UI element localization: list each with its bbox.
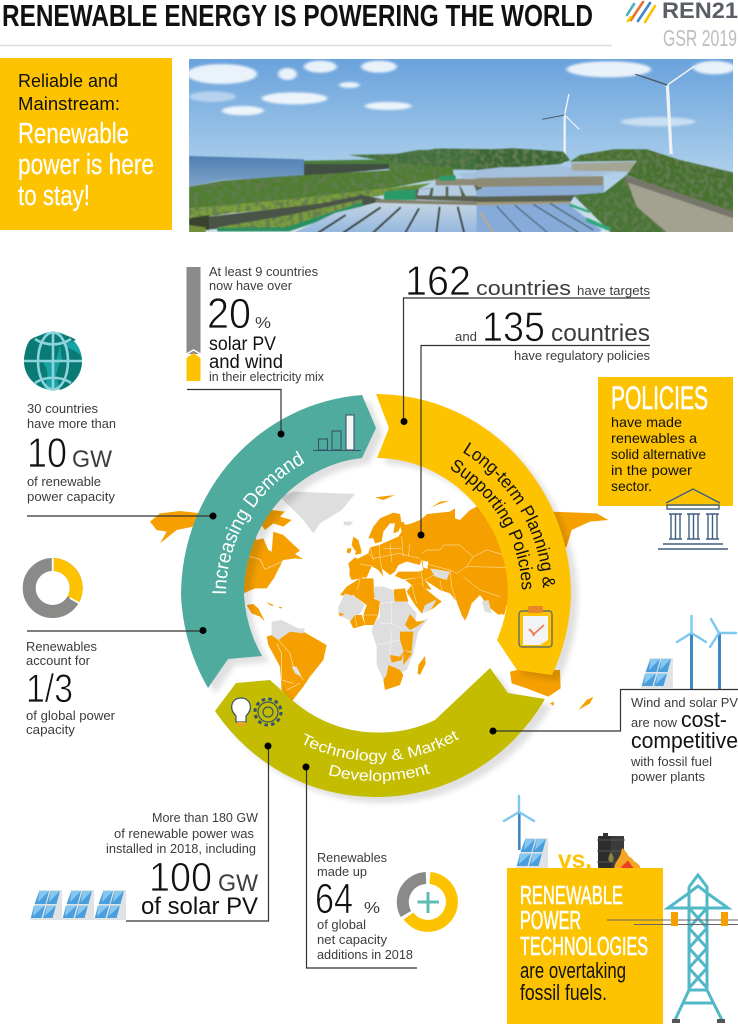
- ring shadow: [188, 400, 578, 803]
- callout: cost competitive: [490, 690, 738, 784]
- world map: [150, 492, 608, 710]
- callout: 100 GW of solar PV: More than 180 GW: [152, 810, 259, 825]
- callout: 135 countries policies: 135: [482, 303, 545, 350]
- callout: 162 countries targets: 162: [405, 257, 471, 304]
- panel: renewable power technologies: POWER: [520, 905, 581, 935]
- callout: 20 percent solar and wind: and wind: [209, 352, 283, 373]
- callout: 10 GW: have more than: [27, 416, 116, 431]
- icon: turbine and panel vs barrel: vs.: [558, 846, 592, 874]
- callout: 100 GW of solar PV: 100: [149, 854, 212, 900]
- photo: solar panels and wind turbines on a green coast: [187, 59, 737, 235]
- panel: reliable and mainstream: Mainstream:: [18, 94, 120, 114]
- icon: turbine and panel vs barrel: [504, 796, 640, 874]
- map: africa: [338, 590, 428, 690]
- segment: long-term planning: Supporting Policies: [451, 460, 533, 590]
- power lines and insulators: [607, 912, 738, 926]
- map: greenland: [280, 492, 355, 533]
- callout: 100 GW of solar PV: [106, 742, 272, 921]
- callout: cost competitive: are now: [631, 715, 678, 730]
- icon: light bulb: [232, 698, 250, 726]
- callout: 100 GW of solar PV: of renewable power was: [114, 826, 254, 841]
- callout: 135 countries policies: [418, 303, 650, 538]
- callout: 64 percent: Renewables: [317, 850, 387, 865]
- segment: increasing demand: [181, 395, 376, 688]
- icon: clipboard: [519, 606, 552, 647]
- callout: 10 GW: [27, 401, 216, 520]
- panel: policies: in the power: [611, 462, 692, 478]
- icon: bar chart: [313, 415, 361, 450]
- segment: increasing demand: Increasing Demand: [212, 450, 304, 594]
- callout: 135 countries policies: have regulatory policies: [514, 348, 650, 363]
- callout: 10 GW: of renewable: [27, 474, 101, 489]
- segment: technology and market development: [215, 668, 545, 797]
- callout: cost competitive: cost-: [681, 707, 727, 732]
- callout: 64 percent: made up: [317, 864, 367, 879]
- panel: policies: [598, 377, 733, 506]
- callout: 10 GW: 30 countries: [27, 401, 98, 416]
- panel: policies: renewables a: [611, 430, 697, 446]
- clouds and turbines: [187, 61, 735, 163]
- segment: technology and market development: Technology & Market: [304, 730, 460, 764]
- callout: one third of capacity: Renewables: [26, 639, 97, 654]
- panel: reliable and mainstream: [0, 58, 172, 230]
- icon: solar panel and wind turbines: [641, 616, 736, 689]
- callout: 162 countries targets: [400, 257, 651, 425]
- callout: 64 percent: 64: [315, 875, 353, 923]
- panel: reliable and mainstream: to stay!: [18, 180, 90, 212]
- donut chart: 64 percent with plus: [403, 878, 452, 926]
- icon: globe: [24, 332, 82, 390]
- icon: government building: [658, 489, 728, 549]
- callout: 20 percent solar and wind: %: [255, 315, 271, 332]
- callout: 64 percent: of global: [317, 917, 366, 932]
- callout: 20 percent solar and wind: now have over: [209, 278, 293, 293]
- panel: policies: sector.: [611, 478, 652, 494]
- panel: reliable and mainstream: Reliable and: [18, 71, 118, 91]
- callout: 162 countries targets: countries: [476, 278, 571, 300]
- callout: 20 percent solar and wind: [186, 264, 324, 438]
- segment: technology and market development: Development: [329, 764, 430, 784]
- callout: 20 percent solar and wind: solar PV: [209, 334, 276, 355]
- map: eurasia and north-east africa: [340, 495, 527, 622]
- segment: long-term planning: [376, 394, 571, 675]
- panel: renewable power technologies: fossil fuels.: [520, 980, 607, 1005]
- segment: long-term planning: Long-term Planning &: [463, 442, 556, 588]
- icon: gear: [255, 699, 281, 725]
- callout: 64 percent: %: [364, 900, 380, 917]
- panel: policies: have made: [611, 414, 682, 430]
- callout: 162 countries targets: have targets: [577, 283, 651, 298]
- callout: cost competitive: power plants: [631, 769, 705, 784]
- callout: one third of capacity: of global power: [26, 708, 116, 723]
- callout: 64 percent: net capacity: [317, 932, 388, 947]
- photo: right half landscape: [477, 148, 737, 235]
- panel: renewable power technologies: [507, 868, 663, 1024]
- callout: one third of capacity: capacity: [26, 722, 76, 737]
- panel: renewable power technologies: are overtaking: [520, 958, 626, 983]
- callout: one third of capacity: [26, 627, 206, 737]
- callout: 20 percent solar and wind: in their electricity mix: [209, 369, 324, 384]
- icon: three solar panels: [30, 890, 126, 920]
- callout: 10 GW: 10: [27, 429, 67, 476]
- photo: left half landscape: [189, 148, 489, 235]
- map: alaska, far east russia and oceania: [150, 511, 608, 710]
- panel: reliable and mainstream: Renewable: [18, 118, 129, 150]
- callout: 64 percent: additions in 2018: [317, 947, 413, 962]
- map: americas and west africa: [243, 510, 372, 702]
- icon: transmission tower: [668, 875, 728, 1023]
- panel: renewable power technologies: TECHNOLOGIES: [520, 931, 648, 961]
- callout: one third of capacity: 1/3: [26, 667, 73, 711]
- callout: cost competitive: Wind and solar PV: [631, 695, 738, 710]
- callout: 100 GW of solar PV: GW: [218, 870, 258, 897]
- callout: 135 countries policies: and: [455, 329, 477, 344]
- callout: 20 percent solar and wind: 20: [207, 290, 251, 338]
- donut chart: one third: [29, 557, 84, 612]
- callout: 100 GW of solar PV: installed in 2018, including: [106, 841, 256, 856]
- callout: 20 percent solar and wind: At least 9 countries: [209, 264, 318, 279]
- callout: 10 GW: GW: [72, 446, 112, 473]
- logo: REN21 GSR 2019: [627, 0, 738, 51]
- callout: 135 countries policies: countries: [551, 320, 650, 347]
- panel: renewable power technologies: RENEWABLE: [520, 880, 623, 910]
- panel: policies: solid alternative: [611, 446, 706, 462]
- callout: 10 GW: power capacity: [27, 489, 115, 504]
- callout: cost competitive: with fossil fuel: [630, 754, 712, 769]
- callout: 64 percent: [302, 764, 417, 968]
- callout: one third of capacity: account for: [26, 653, 91, 668]
- callout: 100 GW of solar PV: of solar PV: [141, 893, 258, 920]
- panel: reliable and mainstream: power is here: [18, 149, 154, 181]
